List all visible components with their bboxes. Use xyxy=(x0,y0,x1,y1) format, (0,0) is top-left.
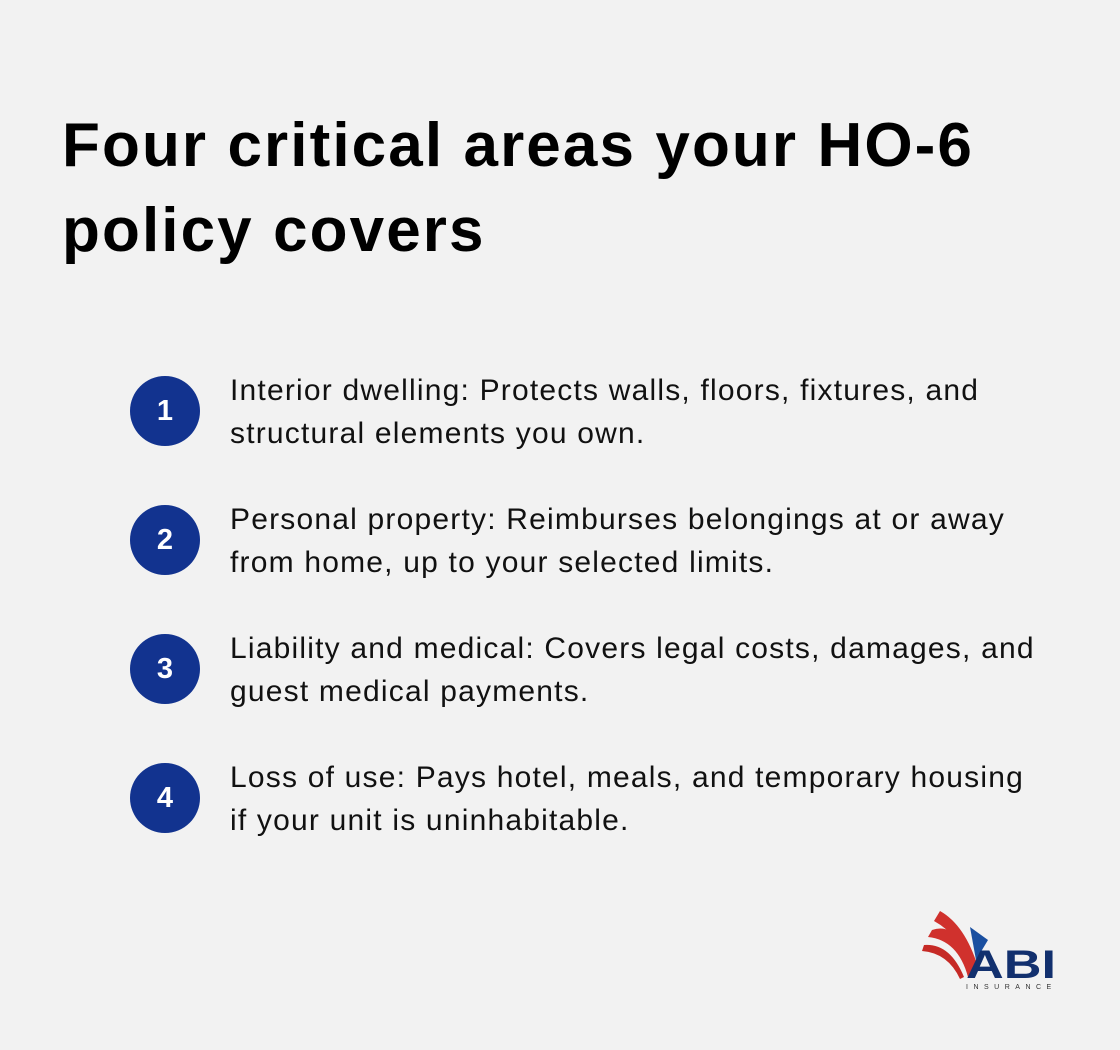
text 2: Personal property: Reimburses belongings at or away xyxy=(230,503,1005,536)
title: Four critical areas your HO-6 xyxy=(62,111,974,180)
text 3 xyxy=(230,632,1035,708)
title xyxy=(62,111,974,265)
badge 3: 3 xyxy=(157,653,173,685)
text 4: Loss of use: Pays hotel, meals, and temporary housing xyxy=(230,761,1024,794)
item 1 xyxy=(130,374,979,450)
text 1 xyxy=(230,374,979,450)
logo: INSURANCE xyxy=(966,984,1057,991)
text 3: guest medical payments. xyxy=(230,675,589,708)
badge 1: 1 xyxy=(157,395,173,427)
text 2: from home, up to your selected limits. xyxy=(230,546,774,579)
badge 2: 2 xyxy=(157,524,173,556)
badge 3 xyxy=(130,634,200,704)
text 1: structural elements you own. xyxy=(230,417,645,450)
badge 4: 4 xyxy=(157,782,173,814)
logo: ABI xyxy=(966,943,1056,987)
text 1: Interior dwelling: Protects walls, floors, fixtures, and xyxy=(230,374,979,407)
badge 4 xyxy=(130,763,200,833)
item 3 xyxy=(130,632,1035,708)
text 4: if your unit is uninhabitable. xyxy=(230,804,630,837)
badge 1 xyxy=(130,376,200,446)
item 4 xyxy=(130,761,1024,837)
logo xyxy=(922,911,1057,991)
text 4 xyxy=(230,761,1024,837)
text 3: Liability and medical: Covers legal costs, damages, and xyxy=(230,632,1035,665)
badge 2 xyxy=(130,505,200,575)
text 2 xyxy=(230,503,1005,579)
title: policy covers xyxy=(62,196,486,265)
item 2 xyxy=(130,503,1005,579)
